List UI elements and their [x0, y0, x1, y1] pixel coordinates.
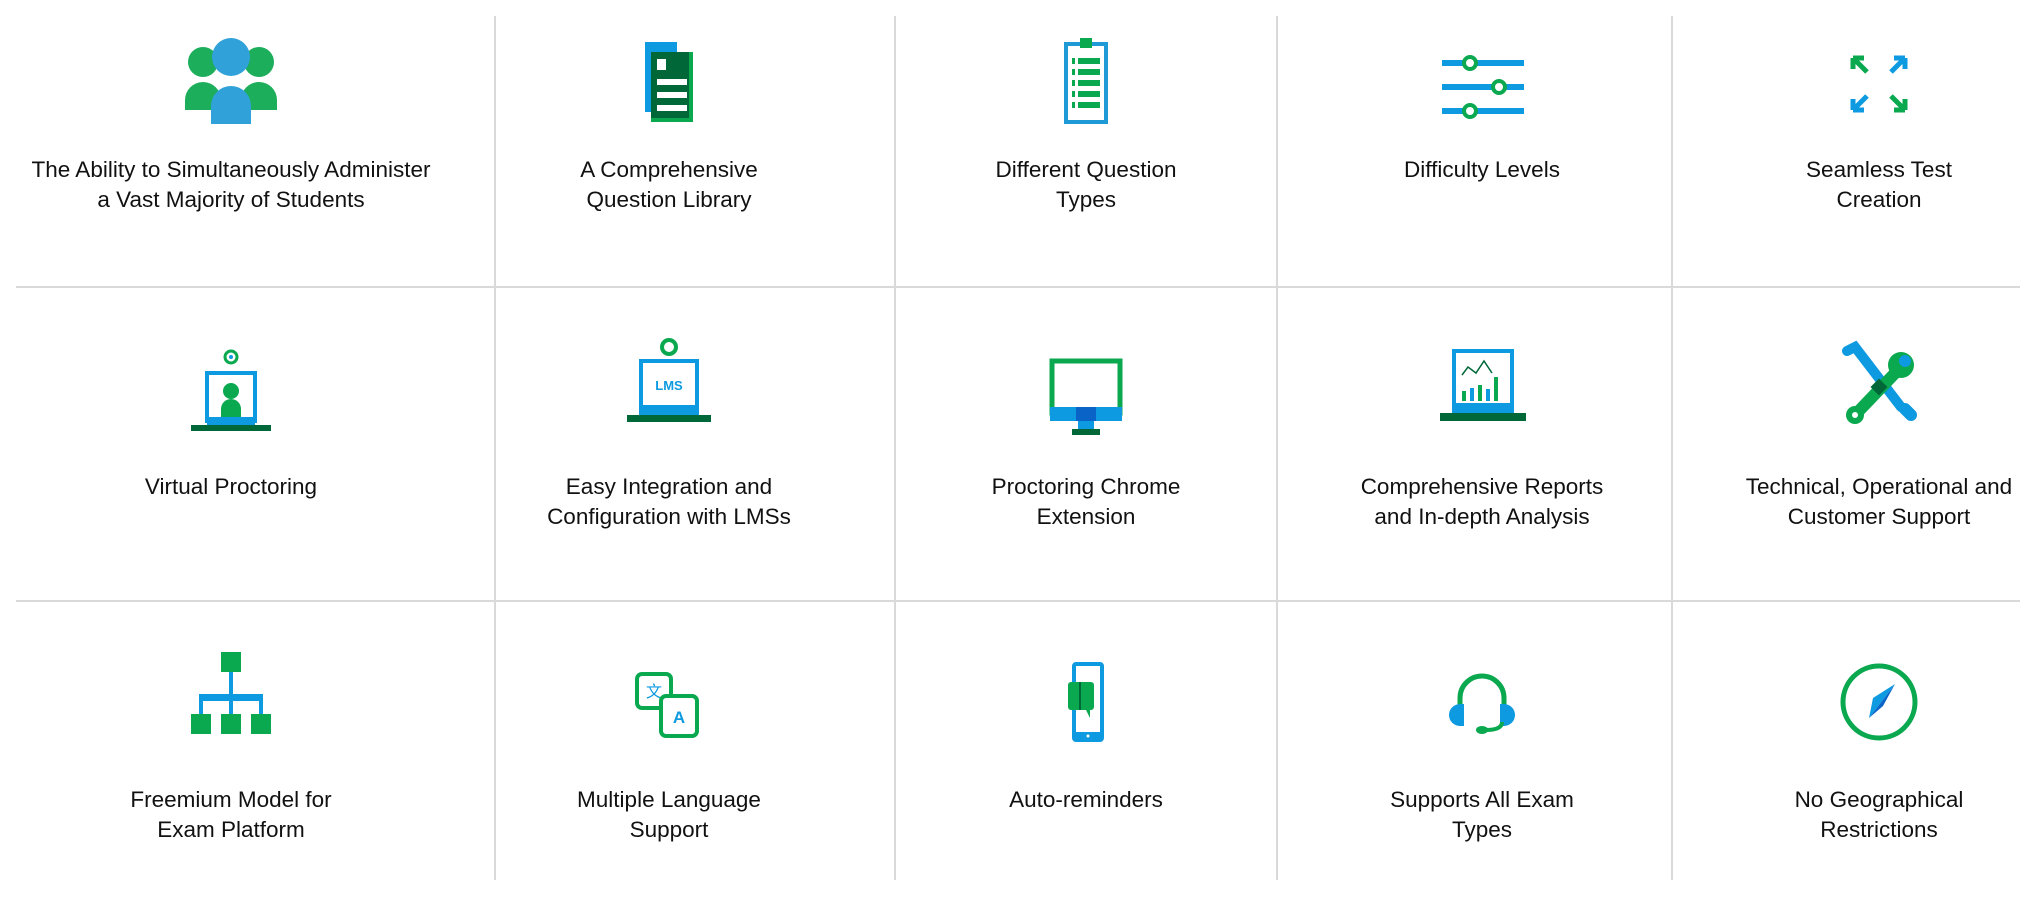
cell: difficulty levels — [1404, 55, 1560, 182]
label: A Comprehensive — [580, 157, 758, 182]
cell: simultaneous students — [32, 38, 430, 212]
icon: laptop with person — [191, 350, 271, 431]
label: Creation — [1836, 187, 1922, 212]
label: Comprehensive Reports — [1361, 474, 1603, 499]
label: a Vast Majority of Students — [97, 187, 365, 212]
label: Exam Platform — [157, 817, 305, 842]
icon: headset — [1449, 674, 1515, 734]
label — [1746, 474, 2012, 529]
label — [1361, 474, 1603, 529]
label: Proctoring Chrome — [992, 474, 1180, 499]
icon: translate bubbles — [635, 672, 699, 738]
cell: auto reminders — [1009, 662, 1163, 812]
cell: multiple language — [577, 672, 761, 842]
label: and In-depth Analysis — [1374, 504, 1590, 529]
label: The Ability to Simultaneously Administer — [32, 157, 430, 182]
label: Different Question — [996, 157, 1176, 182]
cell: no geographical restrictions — [1795, 664, 1963, 842]
cell: virtual proctoring — [145, 350, 317, 499]
icon: people — [185, 38, 277, 124]
label: Freemium Model for — [130, 787, 332, 812]
label: Virtual Proctoring — [145, 474, 317, 499]
icon: hierarchy — [191, 652, 271, 734]
label: Supports All Exam — [1390, 787, 1574, 812]
label: Difficulty Levels — [1404, 157, 1560, 182]
label: Auto-reminders — [1009, 787, 1163, 812]
label: Customer Support — [1788, 504, 1970, 529]
cell: question library — [580, 42, 758, 212]
cell: freemium — [130, 652, 332, 842]
label: Restrictions — [1820, 817, 1938, 842]
icon: phone with chat — [1068, 662, 1104, 742]
icon: library — [645, 42, 693, 122]
label: Support — [630, 817, 708, 842]
label — [32, 157, 430, 212]
icon: translate bubbles: 文 — [646, 678, 662, 702]
label — [580, 157, 758, 212]
cell: reports — [1361, 349, 1603, 529]
label: Configuration with LMSs — [547, 504, 791, 529]
icon: chart laptop — [1440, 349, 1526, 421]
label: Types — [1452, 817, 1512, 842]
icon: LMS laptop: LMS — [655, 378, 683, 393]
icon: expand arrows — [1850, 56, 1908, 112]
cell: seamless test creation — [1806, 56, 1952, 212]
icon: translate bubbles: A — [673, 708, 685, 727]
label: Seamless Test — [1806, 157, 1952, 182]
label: Extension — [1037, 504, 1135, 529]
icon: compass — [1829, 652, 1929, 752]
label — [992, 474, 1180, 529]
label — [1390, 787, 1574, 842]
label — [1649, 785, 2036, 845]
label — [547, 474, 791, 529]
label: Technical, Operational and — [1746, 474, 2012, 499]
cell: question types — [996, 38, 1176, 212]
cell: chrome extension — [992, 358, 1180, 529]
icon: wrench and screwdriver — [1842, 340, 1917, 424]
cell: exam types — [1390, 674, 1574, 842]
icon: clipboard — [1064, 38, 1108, 124]
label: Multiple Language — [577, 787, 761, 812]
label — [1806, 157, 1952, 212]
label: No Geographical — [1795, 787, 1963, 812]
label: Easy Integration and — [566, 474, 772, 499]
label — [996, 157, 1176, 212]
icon: sliders — [1442, 55, 1524, 119]
label: Types — [1056, 187, 1116, 212]
icon: LMS laptop — [627, 338, 711, 422]
cell: LMS — [547, 338, 791, 529]
cell: support tools — [1746, 340, 2012, 529]
label — [130, 787, 332, 842]
label — [577, 787, 761, 842]
label: Question Library — [586, 187, 752, 212]
icon: monitor — [1050, 358, 1122, 435]
